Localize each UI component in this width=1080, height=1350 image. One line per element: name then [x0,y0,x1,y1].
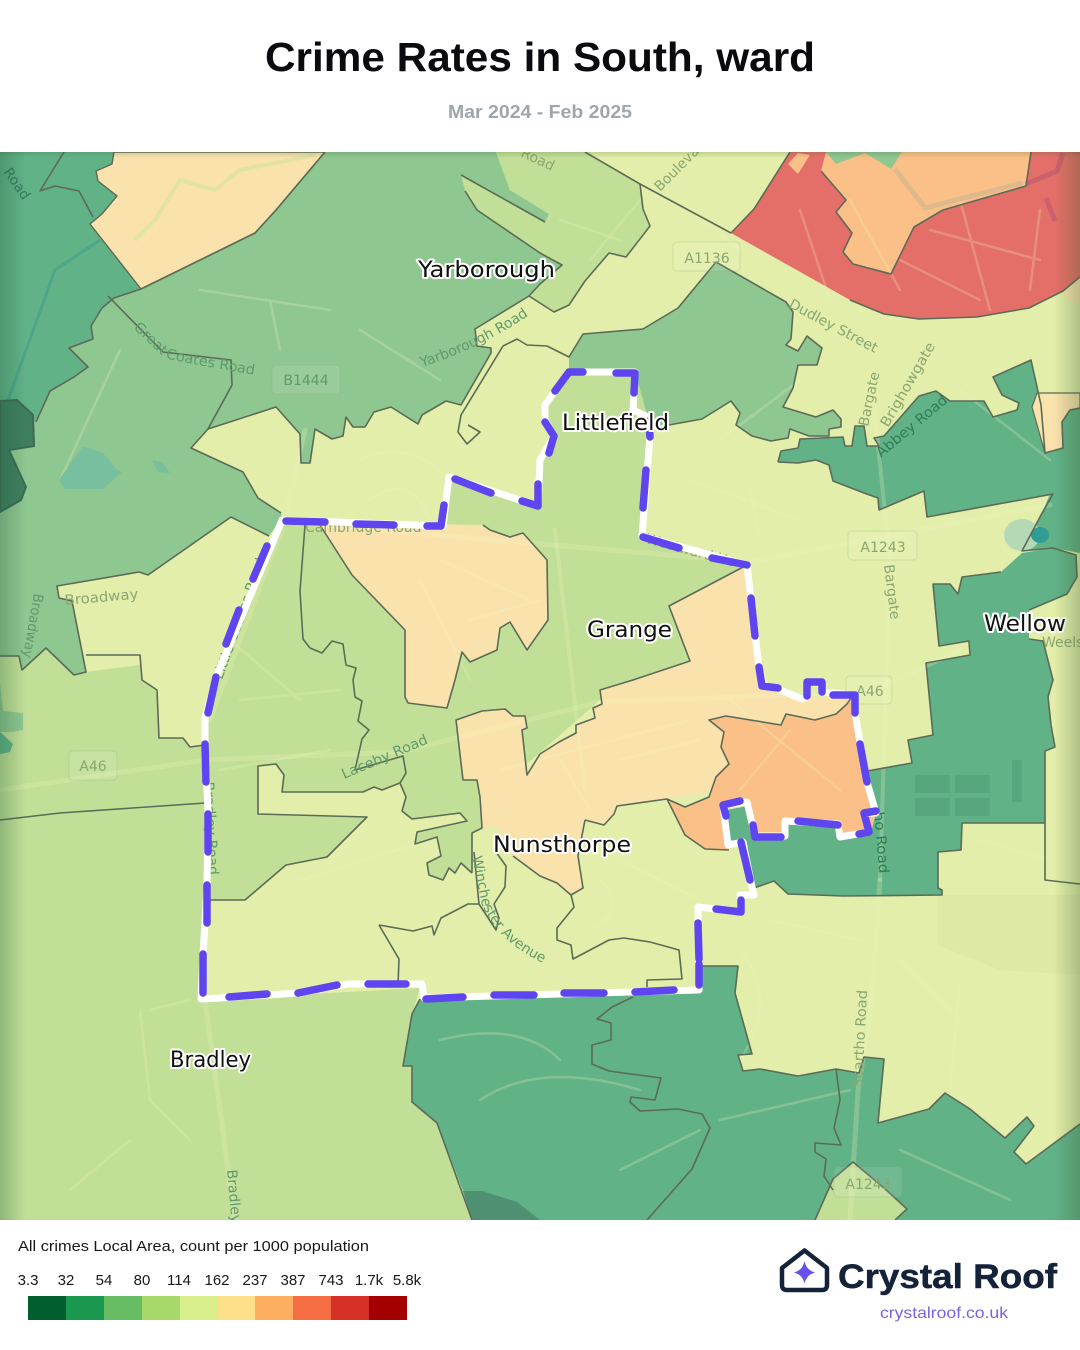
legend scale labels: 237 [242,1272,268,1289]
legend scale labels: 3.3 [18,1272,38,1289]
place labels: Wellow [984,612,1066,637]
logo: Crystal Roof [780,1248,1058,1322]
region: darkest green blob [0,400,34,512]
region: far north-west dark green [0,152,141,422]
region: north-west pale orange [90,152,325,289]
road shields: A1243 [845,1177,891,1193]
road labels: Dudley Street [786,296,881,357]
region: ward interior light green [205,372,747,900]
legend scale labels: 743 [318,1272,344,1289]
legend scale labels: 1.7k [355,1272,384,1289]
road shields: A46 [79,759,107,775]
legend scale labels: 5.8k [393,1272,422,1289]
place labels: Yarborough [417,258,555,283]
region: south dark green [403,966,1080,1220]
legend colour swatches [28,1296,407,1320]
discoloured road overlays [895,169,1022,208]
road labels: Bradley Road [200,781,221,875]
region: south-west light green [0,640,472,1220]
region outlines [0,152,1080,1220]
region: abbey road dark green [778,360,1080,517]
legend scale labels: 80 [134,1272,150,1289]
region: north-west medium green [0,152,562,675]
brand name: Crystal Roof [838,1258,1058,1296]
road labels: Winchester Avenue [472,856,545,962]
region: east pale orange patch [1032,393,1080,453]
map edge shading [0,152,1080,1220]
road labels: Broadway [19,592,46,659]
website: crystalroof.co.uk [880,1305,1009,1322]
ward boundary: white base with purple dashes [201,372,876,999]
shaded area: south-east [938,895,1080,975]
legend scale labels: 387 [280,1272,306,1289]
region: A1243 light green pocket [815,1162,907,1220]
road labels: Bargate [856,370,883,428]
road shields: B1444 [283,373,329,389]
road shields: A1243 [860,540,906,556]
water: lake [59,446,170,489]
place labels: Grange [587,618,672,643]
road labels: Broadway [64,587,139,609]
region: wellow dark green [722,548,1077,896]
road shields: A46 [856,684,884,700]
subtitle: date range: Mar 2024 - Feb 2025 [448,102,632,122]
region: darker south patch [463,1191,540,1220]
legend scale labels: 54 [96,1272,112,1289]
region: north pale orange [318,522,548,708]
title: Crime Rates in South, ward [265,34,815,80]
region: red high crime [731,152,1080,319]
road shields: A1136 [684,251,730,267]
water: east pond [1004,519,1049,551]
road labels: Yarborough Road [419,307,528,366]
road network [0,200,1050,1220]
place labels [170,258,1066,1073]
road shields [69,242,917,1197]
icon: house with star [782,1250,827,1290]
small west patches [0,683,23,732]
region: east dark green with water [1022,494,1080,553]
legend [18,1238,422,1320]
road labels: Brighowgate [878,340,939,430]
region: central pale orange band [456,565,860,895]
place labels: Bradley [170,1048,251,1073]
legend title: All crimes Local Area, count per 1000 population [18,1238,369,1255]
road labels: Great Coates Road [136,323,254,374]
road labels: Little Coates Road [211,556,269,681]
road labels: Westward Ho [644,531,737,571]
road labels: Abbey Road [873,392,951,461]
choropleth map [0,152,1080,1220]
legend scale labels [18,1272,422,1289]
region: littlefield medium green [569,262,841,441]
road labels: Bargate [880,564,903,620]
place labels: Littlefield [562,411,669,436]
place labels: Nunsthorpe [493,833,631,858]
building shading in dark green [915,760,1022,816]
road labels: Scartho Road [850,990,871,1088]
base area: light yellow-green [0,152,1080,1220]
road labels: Laceby Road [339,732,430,783]
small north-east patches [788,153,810,174]
road labels: ho Road [870,811,891,874]
region: north-east orange [821,152,1031,274]
road labels: Cambridge Road [305,520,422,536]
region: broadway light yellow [57,517,269,747]
region: north light green [461,152,650,312]
legend scale labels: 114 [167,1272,191,1289]
legend scale labels: 162 [204,1272,230,1289]
road labels: Road [0,165,33,203]
region: orange high crime [667,695,876,850]
legend scale labels: 32 [58,1272,74,1289]
